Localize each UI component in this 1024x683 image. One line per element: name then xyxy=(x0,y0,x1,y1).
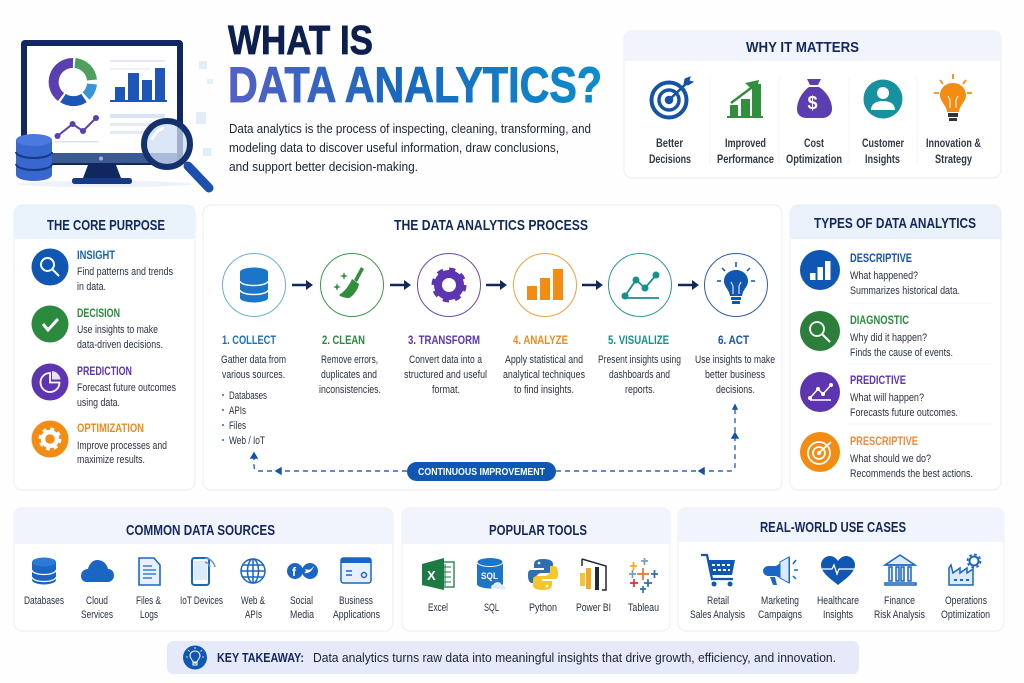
item: optimization: maximize results. xyxy=(77,454,145,466)
labels: use cases: Risk Analysis xyxy=(874,609,925,621)
labels: why it matters: Customer xyxy=(862,138,904,150)
labels: why it matters: Strategy xyxy=(935,154,972,166)
step 6: act: Use insights to make xyxy=(695,354,775,366)
step 4: analyze: Apply statistical and xyxy=(505,354,583,366)
heading: real-world use cases: REAL-WORLD USE CASES xyxy=(760,519,906,536)
item: descriptive xyxy=(800,250,960,297)
heading: why it matters: WHY IT MATTERS xyxy=(746,39,859,56)
item: prediction xyxy=(32,364,176,409)
labels: data sources: APIs xyxy=(245,609,262,621)
labels: tools: Power BI xyxy=(576,602,611,614)
labels: why it matters: Cost xyxy=(804,138,824,150)
icon: shopping cart xyxy=(701,555,735,586)
icon: file xyxy=(139,558,160,585)
labels: data sources: Web & xyxy=(241,595,265,607)
icon: money bag xyxy=(797,79,832,118)
step 5: visualize xyxy=(598,254,681,396)
icon: cloud xyxy=(81,560,114,582)
icon: social media xyxy=(287,563,318,579)
step 1: collect xyxy=(221,254,286,447)
icon: iot device xyxy=(192,558,215,585)
step 5: visualize: Present insights using xyxy=(598,354,681,366)
arrow xyxy=(486,280,507,290)
icon: target xyxy=(652,77,693,118)
icon: money bag: $ xyxy=(808,93,818,113)
step 3: transform: format. xyxy=(432,384,460,396)
icon: python xyxy=(528,559,558,590)
item: predictive: PREDICTIVE xyxy=(850,373,906,387)
intro paragraph: modeling data to discover useful information, draw conclusions, xyxy=(229,140,559,155)
step 6: act: better business xyxy=(705,369,765,381)
panel: popular tools xyxy=(402,508,670,631)
icon: power bi xyxy=(580,559,606,590)
arrow: continuous improvement loop xyxy=(251,405,738,474)
panel: why it matters xyxy=(624,31,1001,178)
step 1: collect: various sources. xyxy=(222,369,285,381)
step 4: analyze: to find insights. xyxy=(514,384,574,396)
step 2: clean: Remove errors, xyxy=(321,354,378,366)
donut chart xyxy=(54,63,92,101)
icon: heart with pulse xyxy=(821,556,856,585)
step 6: act: decisions. xyxy=(716,384,755,396)
title xyxy=(228,17,602,113)
step 1: collect: Web / IoT xyxy=(229,435,265,447)
icon: factory with gear xyxy=(949,554,980,585)
item: insight: Find patterns and trends xyxy=(77,266,173,278)
labels: why it matters: Improved xyxy=(725,138,766,150)
labels: data sources: Services xyxy=(81,609,113,621)
step 2: clean: inconsistencies. xyxy=(319,384,381,396)
labels: tools: SQL xyxy=(484,602,499,614)
item: prescriptive: Recommends the best actions. xyxy=(850,468,973,480)
item: descriptive: What happened? xyxy=(850,270,918,282)
labels: data sources xyxy=(24,595,380,621)
callout: key takeaway xyxy=(167,641,859,674)
item: insight xyxy=(32,248,173,293)
icon: customer xyxy=(864,80,902,118)
labels: tools: Python xyxy=(529,602,557,614)
labels: why it matters: Performance xyxy=(717,154,774,166)
labels: tools: Tableau xyxy=(628,602,659,614)
labels: tools xyxy=(428,602,659,614)
labels: use cases xyxy=(690,595,990,621)
title: WHAT IS xyxy=(228,17,373,63)
step 1: collect: Databases xyxy=(229,390,267,402)
illustration: monitor with charts, database and magnifier xyxy=(16,40,213,188)
bar chart xyxy=(110,68,167,102)
step 5: visualize: reports. xyxy=(625,384,655,396)
labels: use cases: Retail xyxy=(707,595,729,607)
database xyxy=(16,134,52,181)
step 4: analyze xyxy=(503,254,585,396)
labels: use cases: Campaigns xyxy=(758,609,802,621)
item: predictive xyxy=(800,372,958,419)
step 4: analyze: 4. ANALYZE xyxy=(513,333,568,347)
labels: use cases: Finance xyxy=(884,595,915,607)
panel: the core purpose xyxy=(14,205,195,490)
item: decision: DECISION xyxy=(77,306,120,320)
arrow xyxy=(390,280,411,290)
item: descriptive: DESCRIPTIVE xyxy=(850,251,912,265)
panel: common data sources xyxy=(14,508,393,631)
arrow xyxy=(678,280,699,290)
item: diagnostic: Finds the cause of events. xyxy=(850,347,953,359)
item: decision xyxy=(32,306,163,351)
labels: data sources: IoT Devices xyxy=(180,595,223,607)
item: diagnostic: Why did it happen? xyxy=(850,332,927,344)
labels: data sources: Databases xyxy=(24,595,64,607)
step 1: collect: 1. COLLECT xyxy=(222,333,277,347)
labels: why it matters: Insights xyxy=(865,154,900,166)
panel: real-world use cases xyxy=(678,508,1004,631)
intro paragraph: and support better decision-making. xyxy=(229,159,418,174)
icon: business application xyxy=(341,558,371,583)
labels: use cases: Insights xyxy=(823,609,853,621)
item: prediction: Forecast future outcomes xyxy=(77,382,176,394)
icon: databases xyxy=(32,558,56,584)
item: prescriptive: PRESCRIPTIVE xyxy=(850,434,918,448)
step 4: analyze: analytical techniques xyxy=(503,369,585,381)
step 1: collect: APIs xyxy=(229,405,246,417)
step 1: collect: Files xyxy=(229,420,246,432)
panel: the data analytics process xyxy=(203,205,782,490)
labels: use cases: Optimization xyxy=(941,609,990,621)
pill: continuous improvement: CONTINUOUS IMPROVEMENT xyxy=(418,466,545,478)
item: diagnostic: DIAGNOSTIC xyxy=(850,313,909,327)
labels: use cases: Marketing xyxy=(761,595,799,607)
heading: types of data analytics: TYPES OF DATA ANALYTICS xyxy=(814,215,976,232)
labels: use cases: Healthcare xyxy=(817,595,859,607)
line chart xyxy=(54,115,99,142)
item: predictive: Forecasts future outcomes. xyxy=(850,407,958,419)
step 3: transform: Convert data into a xyxy=(409,354,483,366)
labels: why it matters: Decisions xyxy=(649,154,691,166)
step 1: collect: Gather data from xyxy=(221,354,286,366)
arrow xyxy=(292,280,313,290)
labels: tools: Excel xyxy=(428,602,448,614)
item: optimization xyxy=(32,420,167,466)
item: predictive: What will happen? xyxy=(850,392,924,404)
labels: why it matters: Better xyxy=(656,138,683,150)
labels: why it matters: Innovation & xyxy=(926,138,981,150)
intro paragraph: Data analytics is the process of inspecting, cleaning, transforming, and xyxy=(229,121,591,136)
icon: bank xyxy=(885,555,916,585)
step 5: visualize: dashboards and xyxy=(609,369,670,381)
labels: why it matters: Optimization xyxy=(786,154,842,166)
step 6: act xyxy=(695,254,775,396)
item: decision: Use insights to make xyxy=(77,324,158,336)
labels: data sources: Logs xyxy=(140,609,158,621)
labels: data sources: Files & xyxy=(136,595,161,607)
item: prescriptive: What should we do? xyxy=(850,453,931,465)
icon: globe xyxy=(241,559,265,583)
heading: the data analytics process: THE DATA ANALYTICS PROCESS xyxy=(394,217,588,234)
heading: the core purpose: THE CORE PURPOSE xyxy=(47,217,165,234)
callout: key takeaway: Data analytics turns raw data into meaningful insights that drive growth, efficiency, and innovation. xyxy=(313,651,836,665)
item: prediction: using data. xyxy=(77,397,120,409)
labels: use cases: Operations xyxy=(945,595,987,607)
icon: tableau xyxy=(629,558,658,593)
icon: social media: f xyxy=(292,565,297,579)
labels: data sources: Social xyxy=(290,595,313,607)
labels: data sources: Applications xyxy=(333,609,380,621)
icon: growth chart xyxy=(727,80,763,118)
step 2: clean: duplicates and xyxy=(321,369,377,381)
heading: popular tools: POPULAR TOOLS xyxy=(489,522,587,539)
icon: excel: X xyxy=(427,568,436,583)
item: insight: in data. xyxy=(77,281,106,293)
item: optimization: Improve processes and xyxy=(77,440,167,452)
item: diagnostic xyxy=(800,311,953,359)
magnifier xyxy=(144,121,209,188)
step 2: clean: 2. CLEAN xyxy=(322,333,365,347)
icon: light bulb badge xyxy=(183,646,207,670)
heading: common data sources: COMMON DATA SOURCES xyxy=(126,522,275,539)
icon: light bulb xyxy=(934,74,972,121)
labels: use cases: Sales Analysis xyxy=(690,609,745,621)
item: insight: INSIGHT xyxy=(77,248,116,262)
step 2: clean xyxy=(319,254,384,396)
callout: key takeaway: KEY TAKEAWAY: xyxy=(217,651,304,665)
icon: excel xyxy=(422,558,454,590)
item: prediction: PREDICTION xyxy=(77,364,132,378)
pill: continuous improvement xyxy=(407,462,556,481)
labels: data sources: Media xyxy=(290,609,315,621)
panel: types of data analytics xyxy=(790,205,1001,490)
step 3: transform: structured and useful xyxy=(404,369,487,381)
step 6: act: 6. ACT xyxy=(718,333,750,347)
item: prescriptive xyxy=(800,432,973,480)
step 3: transform xyxy=(404,254,487,396)
title: DATA ANALYTICS? xyxy=(228,57,602,113)
labels: data sources: Cloud xyxy=(86,595,108,607)
intro paragraph xyxy=(229,121,591,174)
item: descriptive: Summarizes historical data. xyxy=(850,285,960,297)
icon: megaphone xyxy=(763,557,798,585)
item: decision: data-driven decisions. xyxy=(77,339,163,351)
step 3: transform: 3. TRANSFORM xyxy=(408,333,480,347)
labels: data sources: Business xyxy=(339,595,373,607)
icon: sql xyxy=(477,558,506,590)
icon: sql: SQL xyxy=(481,571,498,582)
labels: why it matters xyxy=(649,138,981,166)
arrow xyxy=(582,280,603,290)
step 5: visualize: 5. VISUALIZE xyxy=(608,333,669,347)
item: optimization: OPTIMIZATION xyxy=(77,421,144,435)
